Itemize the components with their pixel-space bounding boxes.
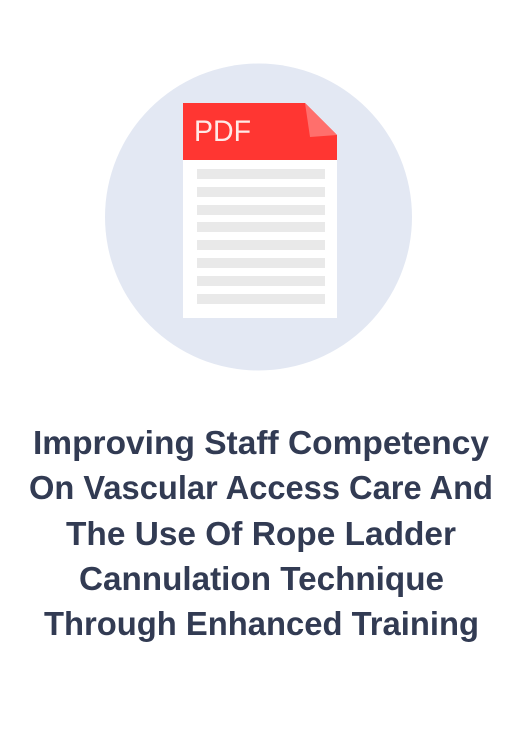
title: Cannulation Technique [79,560,444,597]
title: On Vascular Access Care And [29,469,493,506]
title: Improving Staff Competency [33,424,490,461]
title [29,424,493,642]
folded corner [305,103,337,137]
red document header [183,103,337,160]
PDF label: PDF [194,115,251,148]
title: The Use Of Rope Ladder [66,515,456,552]
document page [183,160,337,318]
title: Through Enhanced Training [44,605,479,642]
background circle [105,64,412,370]
icon: PDF document in circle [105,64,412,370]
document text lines [197,169,325,304]
